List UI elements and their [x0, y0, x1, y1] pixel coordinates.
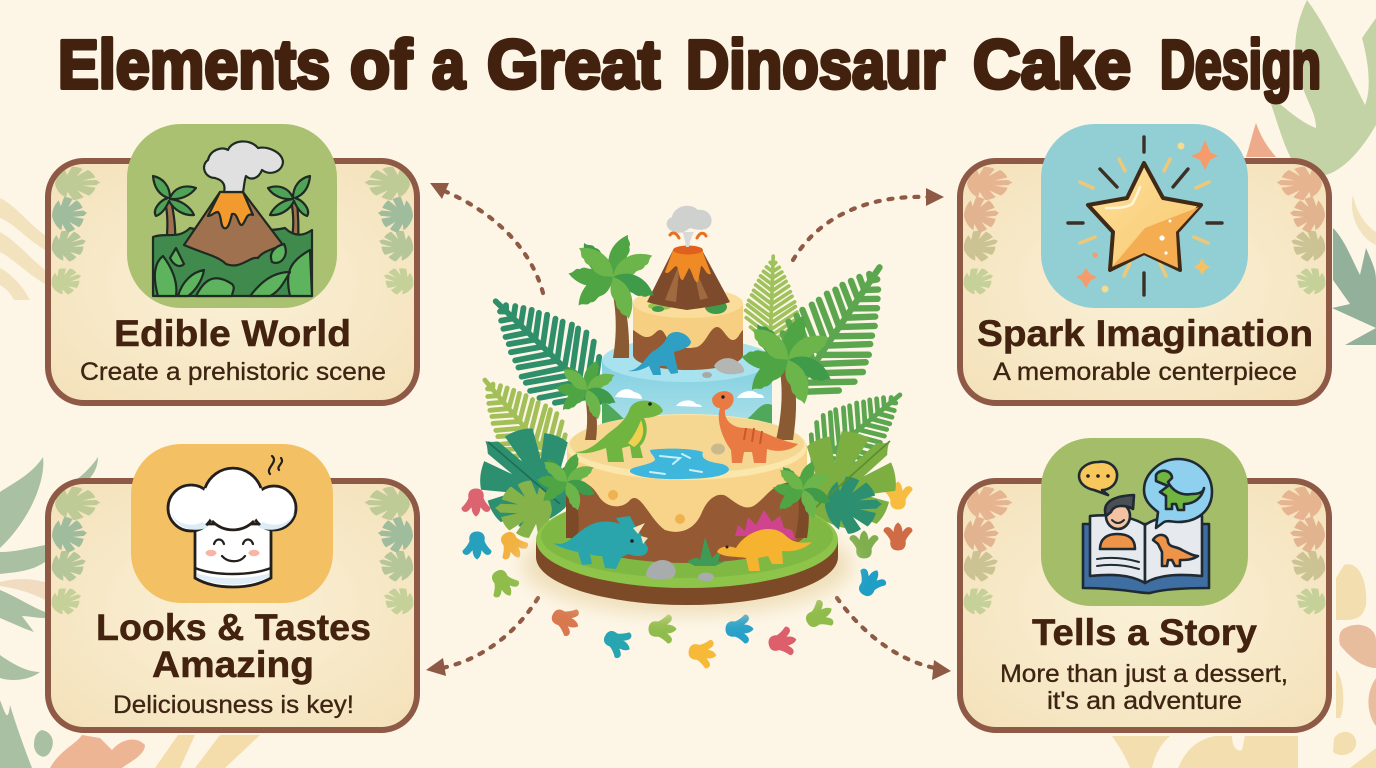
description: More than just a dessert, — [1000, 660, 1288, 688]
icon tile: chef hat — [131, 444, 333, 603]
heading: Amazing — [152, 644, 314, 685]
panel frame — [959, 481, 1330, 730]
top tier — [633, 288, 743, 370]
orange brontosaurus — [712, 391, 798, 463]
orange stegosaurus — [717, 510, 812, 571]
monstera leaves — [452, 401, 924, 551]
arrow: to edible world — [430, 183, 543, 293]
central dinosaur cake illustration — [452, 206, 924, 615]
teal triceratops — [553, 516, 648, 569]
volcano topper — [647, 206, 730, 310]
heading — [96, 607, 371, 685]
icon tile: volcano in jungle — [127, 124, 337, 308]
ferns behind cake — [459, 242, 922, 498]
heading: Tells a Story — [1032, 612, 1257, 653]
description: Deliciousness is key! — [113, 691, 354, 719]
panel: tells a story — [959, 438, 1330, 730]
heading: Looks & Tastes — [96, 607, 371, 648]
title: Cake — [973, 26, 1131, 103]
description: it's an adventure — [1047, 687, 1242, 715]
heading: Spark Imagination — [977, 313, 1313, 354]
cake shadow — [522, 515, 852, 615]
blue dinosaur — [628, 332, 691, 375]
rocks — [646, 358, 744, 582]
arrow: to spark imagination — [793, 188, 944, 260]
arrow: to looks and tastes amazing — [426, 598, 538, 676]
title: of — [350, 26, 413, 103]
bottom tier top with river — [567, 414, 807, 480]
middle tier — [602, 338, 772, 452]
arrow: to tells a story — [837, 598, 951, 680]
panel frame — [959, 161, 1330, 403]
title — [58, 26, 1321, 103]
cake board — [536, 492, 838, 605]
panel: looks and tastes amazing — [47, 444, 418, 730]
description: A memorable centerpiece — [993, 358, 1297, 386]
title: a — [432, 26, 466, 103]
icon tile: star — [1041, 124, 1248, 308]
title: Elements — [58, 26, 330, 103]
panel frame — [47, 161, 418, 403]
title: Great — [487, 26, 660, 103]
bottom tier — [567, 445, 807, 563]
description: Create a prehistoric scene — [80, 358, 386, 386]
dinosaur footprints — [462, 482, 912, 669]
icon tile: story book — [1041, 438, 1248, 606]
description — [1000, 660, 1288, 715]
heading: Edible World — [114, 313, 351, 354]
green t-rex — [575, 401, 663, 462]
panel: spark imagination — [959, 124, 1330, 403]
panel: edible world — [47, 124, 418, 403]
panel frame — [47, 481, 418, 730]
palm trees — [535, 231, 835, 538]
title: Dinosaur — [686, 26, 945, 103]
